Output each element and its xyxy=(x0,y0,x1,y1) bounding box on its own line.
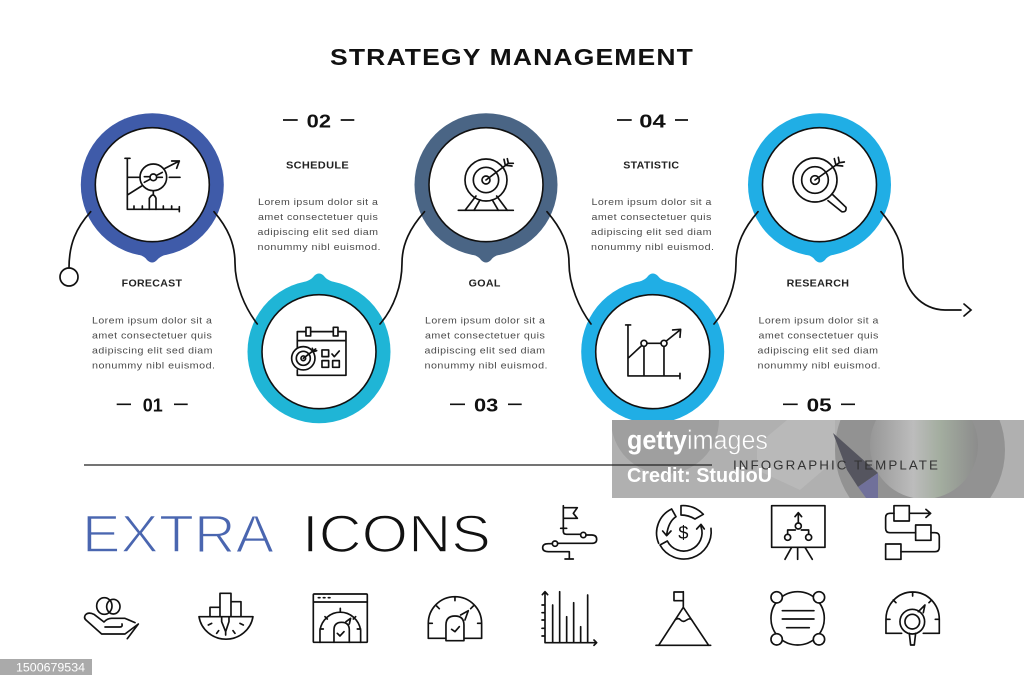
number: 01 xyxy=(117,395,188,416)
icon: magnifier target xyxy=(793,157,846,212)
step 1: forecast xyxy=(81,113,224,416)
text: goal body: adipiscing elit sed diam xyxy=(424,345,546,356)
step 5: research xyxy=(748,113,891,416)
icon: speedometer xyxy=(428,597,482,641)
number: 05: 05 xyxy=(807,395,832,416)
icon: bar chart xyxy=(542,592,597,645)
number: 04 xyxy=(617,110,688,131)
step 4: statistic xyxy=(581,110,724,423)
icon: process flow xyxy=(886,506,939,559)
icon: line chart xyxy=(626,325,681,379)
icon: bars on gauge xyxy=(199,593,253,639)
number: 04: 04 xyxy=(639,110,667,131)
icon: dollar cycle: $ xyxy=(678,522,688,543)
divider line xyxy=(84,464,712,466)
watermark text xyxy=(627,425,772,487)
number: 01: 01 xyxy=(143,395,163,416)
icon: mountain flag xyxy=(656,592,711,645)
ring: statistic xyxy=(581,274,724,423)
text: forecast body xyxy=(92,315,216,371)
icon: browser speedometer xyxy=(313,594,367,642)
text: schedule body: adipiscing elit sed diam xyxy=(258,227,378,238)
icon: dial gauge xyxy=(886,592,939,645)
icon: circle with list xyxy=(771,592,825,645)
text: goal body xyxy=(424,315,548,371)
label: forecast: FORECAST xyxy=(122,278,183,290)
text: schedule body: Lorem ipsum dolor sit a xyxy=(258,197,379,208)
text: goal body: nonummy nibl euismod. xyxy=(424,360,548,371)
icon: forecast chart xyxy=(125,158,180,212)
number: 02 xyxy=(283,110,354,131)
text: statistic body: amet consectetuer quis xyxy=(592,212,712,223)
number: 03: 03 xyxy=(474,395,498,416)
text: forecast body: adipiscing elit sed diam xyxy=(92,345,213,356)
image id tag xyxy=(0,659,92,675)
text: forecast body: Lorem ipsum dolor sit a xyxy=(92,315,213,326)
heading: extra icons: ICONS xyxy=(302,505,491,564)
text: research body: Lorem ipsum dolor sit a xyxy=(758,315,879,326)
text: schedule body: nonummy nibl euismod. xyxy=(258,242,381,253)
step 2: schedule xyxy=(248,110,390,423)
subtitle: infographic template: INFOGRAPHIC TEMPLATE xyxy=(733,458,940,472)
icon: archery target xyxy=(458,159,513,210)
title: STRATEGY MANAGEMENT xyxy=(330,44,694,70)
icon: calendar with target xyxy=(292,327,346,375)
text: research body: amet consectetuer quis xyxy=(758,330,879,341)
text: goal body: amet consectetuer quis xyxy=(425,330,545,341)
number: 03 xyxy=(450,395,522,416)
ring: research xyxy=(748,113,891,262)
label: schedule: SCHEDULE xyxy=(286,159,349,171)
number: 02: 02 xyxy=(307,110,331,131)
icon: dollar cycle xyxy=(657,506,711,559)
label: goal: GOAL xyxy=(469,278,501,290)
image id tag: 1500679534 xyxy=(16,660,85,674)
step 3: goal xyxy=(414,113,558,416)
text: statistic body: nonummy nibl euismod. xyxy=(591,242,714,253)
label: research: RESEARCH xyxy=(787,278,849,290)
heading: extra icons xyxy=(82,505,491,564)
text: statistic body xyxy=(591,197,714,253)
ring: goal xyxy=(414,113,558,262)
text: research body: nonummy nibl euismod. xyxy=(758,360,881,371)
ring: schedule xyxy=(248,274,390,423)
label: statistic: STATISTIC xyxy=(623,159,679,171)
number: 05 xyxy=(783,395,855,416)
text: forecast body: amet consectetuer quis xyxy=(92,330,212,341)
text: schedule body xyxy=(258,197,381,253)
text: goal body: Lorem ipsum dolor sit a xyxy=(425,315,546,326)
watermark text: images xyxy=(687,425,768,455)
watermark text: getty xyxy=(627,425,687,455)
watermark text: Credit: StudioU xyxy=(627,465,772,487)
icon: hand with rings xyxy=(85,598,138,639)
icon: presentation board xyxy=(772,506,825,559)
text: statistic body: Lorem ipsum dolor sit a xyxy=(592,197,712,208)
ring: forecast xyxy=(81,113,224,262)
text: forecast body: nonummy nibl euismod. xyxy=(92,360,216,371)
text: statistic body: adipiscing elit sed diam xyxy=(591,227,712,238)
heading: extra icons: EXTRA xyxy=(82,505,275,564)
text: research body: adipiscing elit sed diam xyxy=(758,345,878,356)
text: research body xyxy=(758,315,881,371)
text: schedule body: amet consectetuer quis xyxy=(258,212,378,223)
connector line with start dot and end arrow xyxy=(60,212,971,324)
watermark panel xyxy=(612,420,1024,498)
icon: flag route xyxy=(543,506,597,559)
